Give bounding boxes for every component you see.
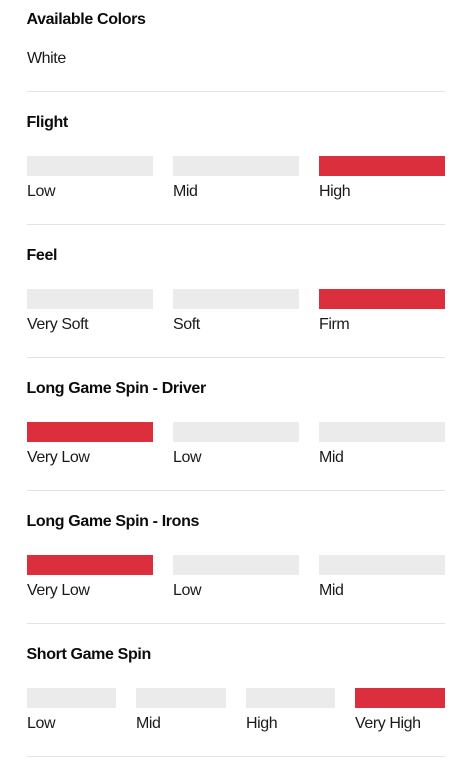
- label: very soft: Very Soft: [27, 316, 88, 333]
- label: high: High: [246, 715, 277, 732]
- heading: short game spin: Short Game Spin: [26, 646, 151, 663]
- panel: short game spin: [26, 646, 445, 732]
- panel: flight: [26, 114, 445, 200]
- label: mid: Mid: [319, 582, 344, 599]
- segment: mid: [136, 688, 226, 708]
- segment: mid: [173, 156, 299, 176]
- segment: soft: [173, 289, 299, 309]
- rating scale: feel: [27, 289, 445, 333]
- label: very low: Very Low: [27, 582, 89, 599]
- segment: mid: [319, 422, 445, 442]
- heading: feel: Feel: [26, 247, 57, 264]
- label: very high: Very High: [355, 715, 421, 732]
- segment: very soft: [27, 289, 153, 309]
- rating scale: flight: [27, 156, 445, 200]
- panel: available colors: [26, 11, 146, 67]
- panel: long game spin driver: [26, 380, 445, 466]
- label: very low: Very Low: [27, 449, 89, 466]
- segment: low: [27, 156, 153, 176]
- rating scale: long game spin irons: [27, 555, 445, 599]
- label: low: Low: [173, 449, 201, 466]
- segment: very high, selected: [355, 688, 445, 708]
- label: low: Low: [27, 715, 55, 732]
- segment: very low, selected: [27, 555, 153, 575]
- heading: flight: Flight: [26, 114, 68, 131]
- label: mid: Mid: [136, 715, 161, 732]
- heading: long game spin irons: Long Game Spin - Irons: [26, 513, 199, 530]
- heading: long game spin driver: Long Game Spin - Driver: [26, 380, 206, 397]
- segment: firm, selected: [319, 289, 445, 309]
- segment: high: [246, 688, 335, 708]
- segment: high, selected: [319, 156, 445, 176]
- panel: feel: [26, 247, 445, 333]
- rating scale: long game spin driver: [27, 422, 445, 466]
- segment: low: [27, 688, 116, 708]
- heading: available colors: Available Colors: [26, 11, 146, 28]
- label: low: Low: [27, 183, 55, 200]
- label: high: High: [319, 183, 350, 200]
- label: firm: Firm: [319, 316, 349, 333]
- label: mid: Mid: [173, 183, 198, 200]
- segment: low: [173, 422, 299, 442]
- rating scale: short game spin: [27, 688, 445, 732]
- label: soft: Soft: [173, 316, 200, 333]
- label: mid: Mid: [319, 449, 344, 466]
- panel: long game spin irons: [26, 513, 445, 599]
- segment: mid: [319, 555, 445, 575]
- text: white: White: [27, 50, 66, 67]
- label: low: Low: [173, 582, 201, 599]
- segment: very low, selected: [27, 422, 153, 442]
- segment: low: [173, 555, 299, 575]
